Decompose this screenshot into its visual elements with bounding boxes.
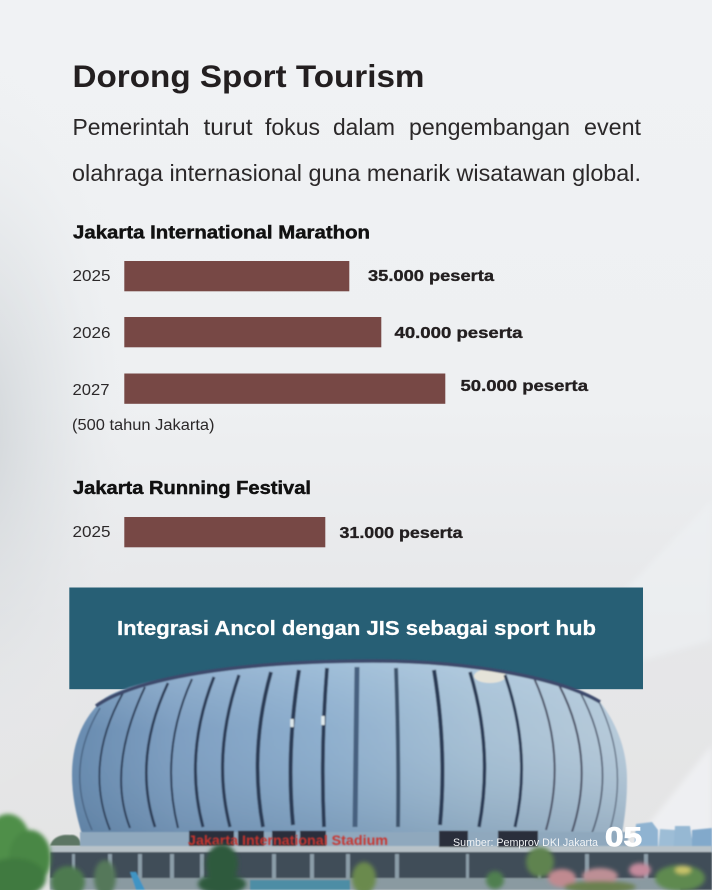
row: 2027: 2027: [72, 382, 110, 399]
intro text: [72, 114, 642, 186]
dome ribs: [80, 667, 617, 833]
trees and shrubs: [0, 814, 705, 890]
intro text: event: [584, 114, 642, 140]
row: 2025: 35.000 peserta: [368, 268, 494, 285]
intro text: pengembangan: [409, 114, 570, 140]
row: 2026: [72, 317, 523, 347]
page number: 05: [605, 822, 642, 852]
title: Dorong Sport Tourism: [72, 58, 424, 94]
stadium sign: Jakarta International Stadium: [188, 833, 388, 848]
bar chart: Jakarta Running Festival: [72, 517, 463, 547]
intro text: fokus: [265, 114, 320, 140]
callout banner: [69, 588, 643, 689]
distant trees left: [50, 835, 82, 846]
intro text: turut: [204, 114, 253, 140]
bar chart: Jakarta International Marathon: [72, 261, 588, 404]
intro text: dalam: [333, 114, 395, 140]
note: 500 tahun Jakarta: (500 tahun Jakarta): [72, 417, 214, 434]
row: 2026: 40.000 peserta: [394, 325, 523, 342]
row: 2026: 2026: [72, 325, 110, 342]
callout banner: Integrasi Ancol dengan JIS sebagai sport hub: [117, 617, 596, 640]
source note: Sumber: Pemprov DKI Jakarta: [453, 837, 599, 849]
row: 2027: [72, 374, 588, 404]
dome rim: [96, 661, 600, 706]
intro text: Pemerintah: [72, 114, 190, 140]
row: 2025: [72, 261, 494, 291]
row: 2025: 2025: [72, 268, 110, 285]
heading: Jakarta Running Festival: Jakarta Running Festival: [73, 477, 311, 498]
bar chart: Jakarta Running Festival: 2025: [72, 524, 110, 541]
heading: Jakarta International Marathon: Jakarta International Marathon: [73, 222, 370, 242]
stadium dome: [72, 661, 627, 834]
bar chart: Jakarta Running Festival: 31.000 peserta: [340, 525, 463, 542]
intro text: olahraga internasional guna menarik wisatawan global.: [72, 160, 641, 186]
stadium base: [50, 831, 712, 890]
row: 2027: 50.000 peserta: [460, 378, 588, 395]
city skyline: [634, 822, 712, 852]
photo: stadium and surroundings: [0, 661, 712, 890]
